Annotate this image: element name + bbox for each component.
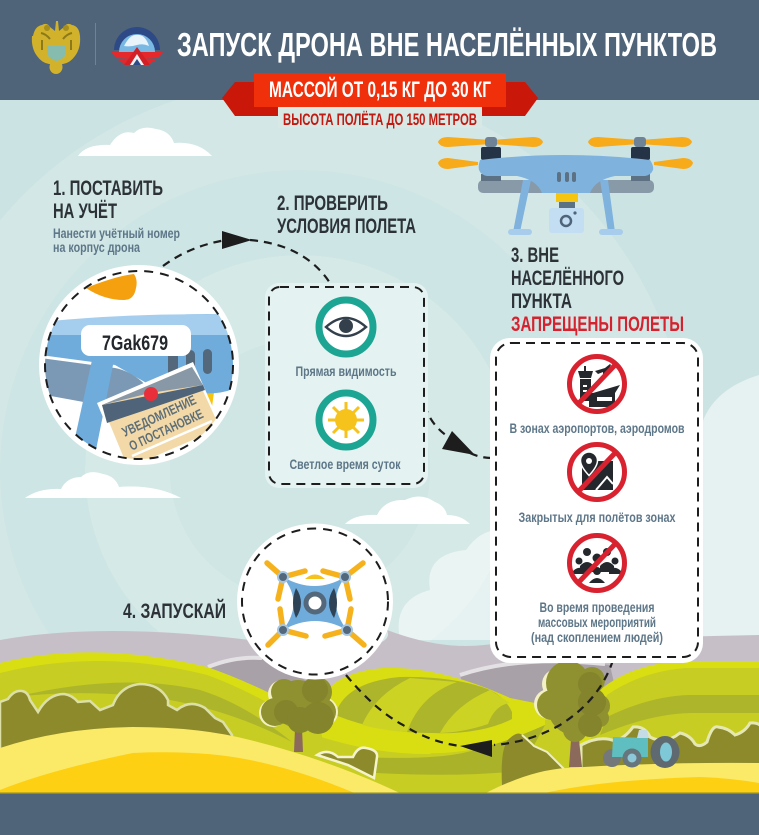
heading: step 3 [511,244,684,336]
text: step 1 description: на корпус дрона [53,240,140,255]
grey wing [45,358,144,402]
ribbon tails [222,82,538,116]
base field [322,720,580,792]
altitude panel [278,107,482,128]
foreground right field [484,763,759,794]
icon: no closed zones [570,444,624,500]
heading: step 1 [53,177,163,223]
bush: left of tree 2 [502,734,562,786]
heading: step 1: НА УЧЁТ [53,200,117,223]
right hill [570,661,759,768]
icon: sun [319,393,373,447]
drone illustration [438,137,693,235]
heading: step 1: 1. ПОСТАВИТЬ [53,177,163,200]
icon: eye [319,300,373,354]
propeller blades [267,563,364,645]
text: closed zones: Закрытых для полётов зонах [518,510,676,525]
tree 2 [534,661,610,767]
left hill [0,652,432,754]
ribbon banner [222,73,538,129]
body [479,155,653,193]
arrow: step 3 to step 4 [346,660,613,757]
notification card: УВЕДОМЛЕНИЕ [120,392,199,440]
heading: step 3: 3. ВНЕ [511,244,559,267]
propellers [438,137,693,169]
clouds [25,128,759,640]
icon: no airports [570,356,624,412]
heading: step 4: 4. ЗАПУСКАЙ [123,599,226,623]
bush: centre [317,748,377,778]
left bushes [0,682,234,748]
text: step 1 description [53,226,180,255]
lower field band [360,725,545,775]
ribbon main panel [254,73,506,107]
heading: step 2 [277,192,416,238]
gimbal [556,193,578,202]
heading: step 3: НАСЕЛЁННОГО [511,267,624,290]
text: step 1 description: Нанести учётный номер [53,226,180,241]
heading: step 2: 2. ПРОВЕРИТЬ [277,192,388,215]
foreground left field [0,727,402,794]
circle: launch [237,524,393,680]
panel: restrictions [490,338,703,663]
weight text: МАССОЙ ОТ 0,15 КГ ДО 30 КГ [269,77,491,102]
divider [95,23,96,65]
grey arms [478,180,654,193]
motors [481,137,650,160]
middle hill with stripes [320,668,545,753]
text: airports: В зонах аэропортов, аэродромов [510,421,684,436]
heading: step 3: ЗАПРЕЩЕНЫ ПОЛЕТЫ [511,313,684,336]
tractor [603,730,680,768]
text: mass events: (над скоплением людей) [531,630,663,645]
text: line of sight: Прямая видимость [296,364,396,379]
notification card: О ПОСТАНОВКЕ [127,406,206,454]
far mountains [0,630,759,720]
header band [0,0,759,100]
heading: step 3: ПУНКТА [511,290,572,313]
legs [513,180,615,232]
registration number: 7Gak679 [102,332,168,355]
text: daylight: Светлое время суток [290,457,401,472]
right bushes [580,721,759,768]
leg [76,362,113,449]
yellow detail [206,393,214,406]
text: mass events: Во время проведения [540,600,654,615]
hubs [278,572,352,635]
camera [549,208,584,233]
number plate [81,325,191,356]
altitude text: ВЫСОТА ПОЛЁТА ДО 150 МЕТРОВ [283,111,477,129]
text: mass events [531,600,663,645]
drone body [40,314,240,393]
circle: registration number [39,265,240,472]
icon: no crowds [570,536,624,590]
logo: eagle emblem [32,21,80,74]
arrow: step 2 to step 3 [425,405,493,458]
panel: flight conditions [265,283,428,488]
vents [168,356,178,373]
tree 1 [259,677,338,752]
heading: step 2: УСЛОВИЯ ПОЛЕТА [277,215,416,238]
vents [557,172,576,182]
text: mass events: массовых мероприятий [538,615,656,630]
landscape [0,630,759,794]
footer band [0,794,759,835]
orange propeller fragment [86,274,137,300]
drone top view [267,563,364,645]
notification card [97,362,216,459]
arrow: step 1 to step 2 [163,231,330,283]
logo: aviation emblem [111,27,163,65]
